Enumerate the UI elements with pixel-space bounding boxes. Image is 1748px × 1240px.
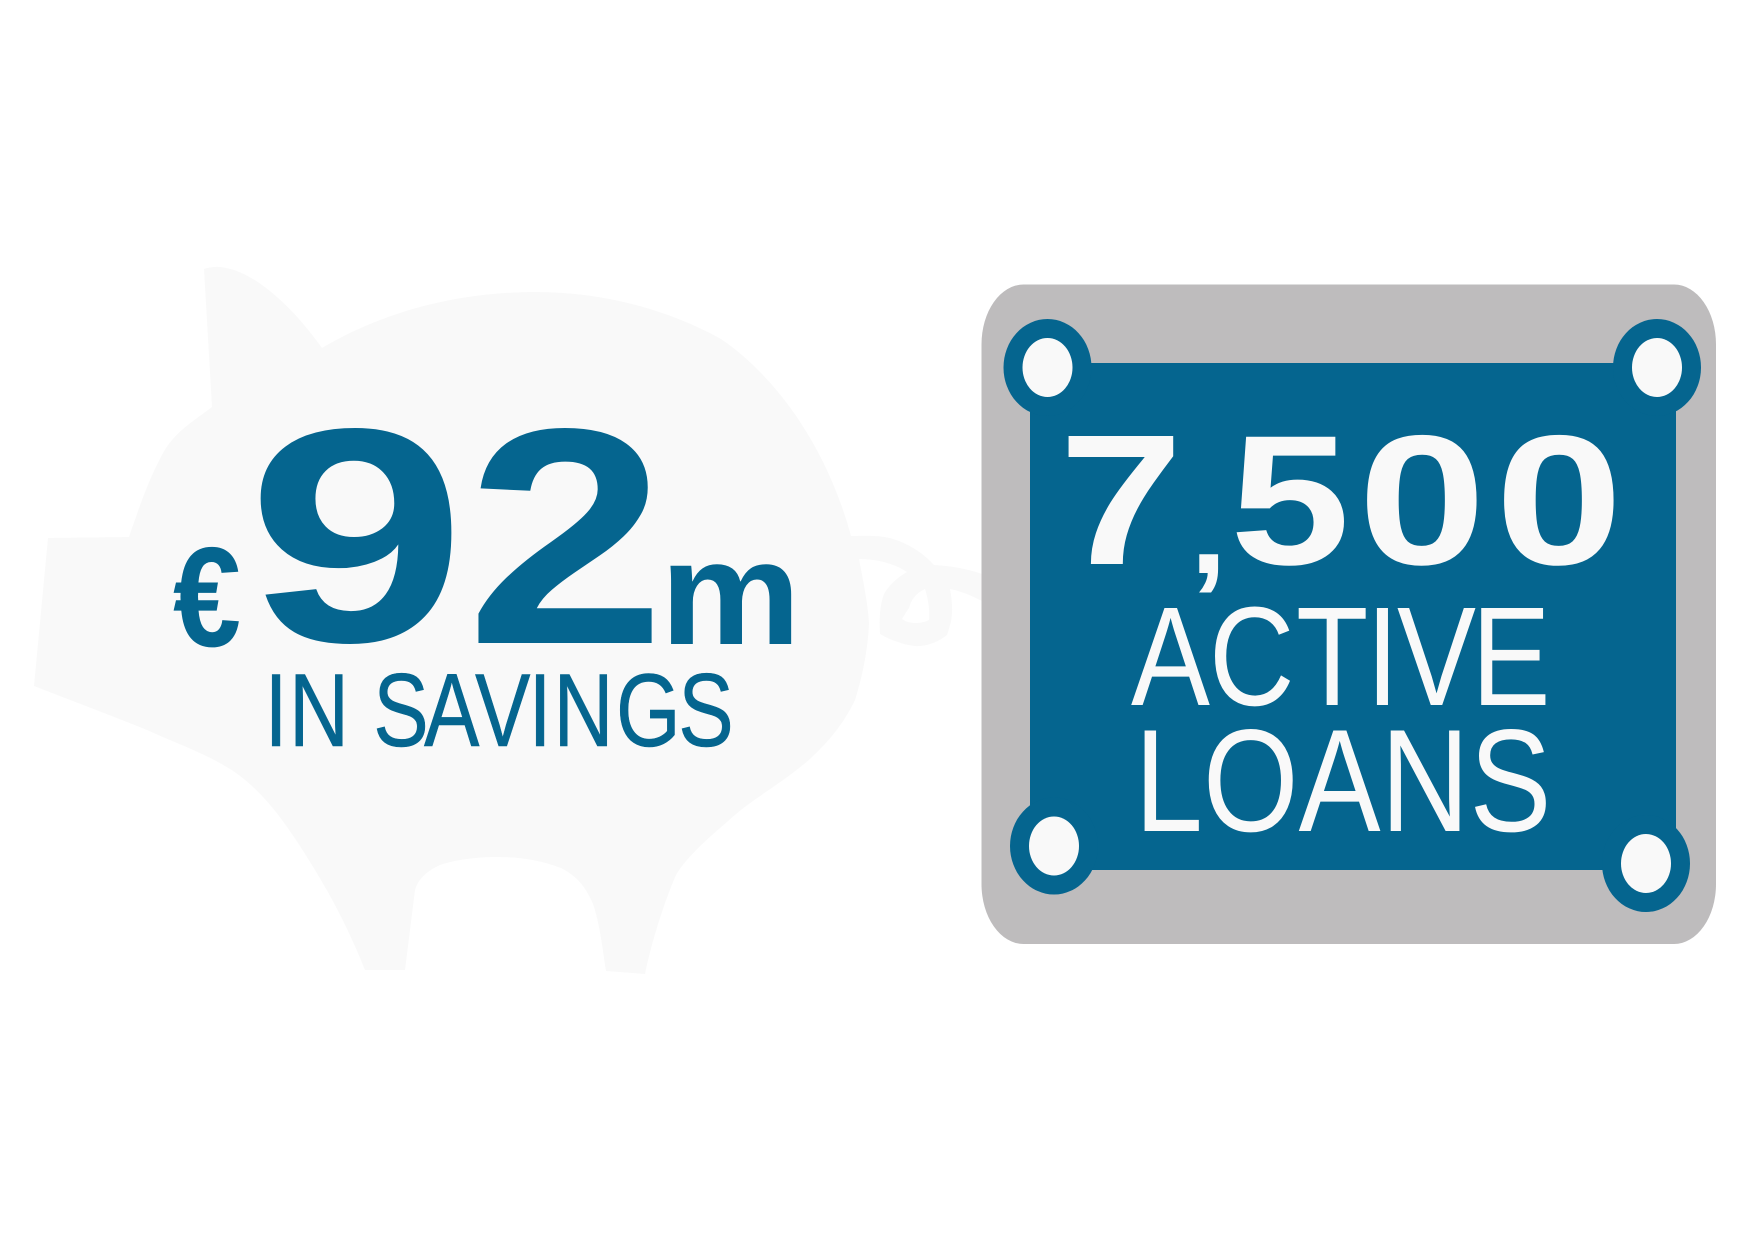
figure 7,500: , bbox=[1190, 459, 1227, 600]
loan sign panel bbox=[982, 284, 1716, 944]
figure 7,500: 0 bbox=[1358, 398, 1486, 604]
grey backing board bbox=[982, 284, 1716, 944]
large figure 92: 2 bbox=[466, 365, 666, 709]
in savings label: IN SAVINGS bbox=[264, 652, 734, 768]
figure 7,500: 0 bbox=[1495, 398, 1623, 604]
blue sign plate bbox=[1004, 319, 1701, 912]
millions suffix m: m bbox=[660, 511, 801, 676]
figure 7,500: 7 bbox=[1059, 397, 1183, 604]
euro symbol: € bbox=[173, 518, 241, 677]
large figure 92: 9 bbox=[247, 365, 466, 706]
large figure 92 bbox=[247, 365, 666, 709]
figure 7,500: 5 bbox=[1230, 398, 1350, 604]
screw holes bbox=[1022, 338, 1682, 893]
loans label: LOANS bbox=[1134, 699, 1552, 862]
active label: ACTIVE bbox=[1131, 577, 1551, 735]
figure 7,500 bbox=[1059, 397, 1623, 604]
piggy bank silhouette bbox=[34, 267, 982, 974]
